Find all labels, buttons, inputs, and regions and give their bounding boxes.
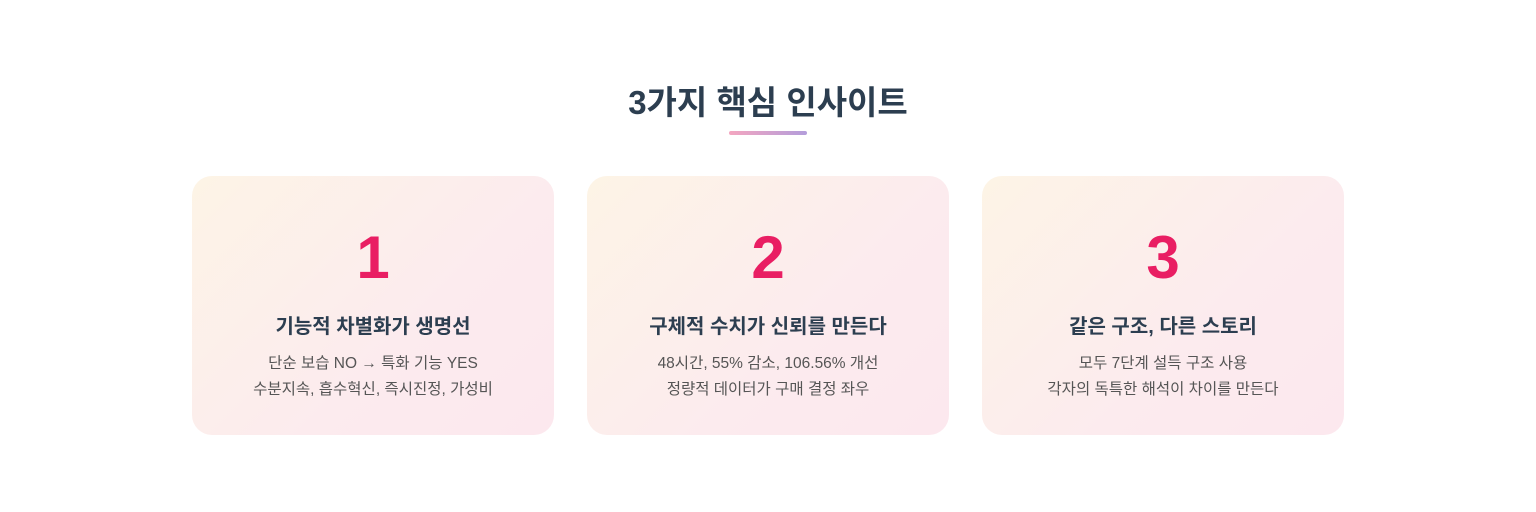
description 2: 48시간, 55% 감소, 106.56% 개선 bbox=[658, 355, 878, 372]
number 2: 2 bbox=[751, 224, 785, 291]
panel: insight 2 bbox=[587, 176, 949, 435]
heading 2: 구체적 수치가 신뢰를 만든다 bbox=[649, 316, 887, 338]
heading 3: 같은 구조, 다른 스토리 bbox=[1069, 316, 1257, 338]
description 3 bbox=[1047, 355, 1279, 398]
number 1: 1 bbox=[356, 224, 390, 291]
heading 1: 기능적 차별화가 생명선 bbox=[275, 316, 471, 338]
title: 3가지 핵심 인사이트 bbox=[628, 84, 908, 121]
panel: insight 3 bbox=[982, 176, 1344, 435]
description 1 bbox=[253, 355, 493, 398]
number 3: 3 bbox=[1146, 224, 1180, 291]
title underline bbox=[729, 131, 807, 135]
description 3: 각자의 독특한 해석이 차이를 만든다 bbox=[1047, 381, 1279, 398]
description 2: 정량적 데이터가 구매 결정 좌우 bbox=[667, 381, 869, 398]
description 2 bbox=[658, 355, 878, 398]
panel: insight 1 bbox=[192, 176, 554, 435]
description 1: 단순 보습 NO → 특화 기능 YES bbox=[268, 355, 478, 372]
description 3: 모두 7단계 설득 구조 사용 bbox=[1079, 355, 1247, 372]
description 1: 수분지속, 흡수혁신, 즉시진정, 가성비 bbox=[253, 381, 493, 398]
